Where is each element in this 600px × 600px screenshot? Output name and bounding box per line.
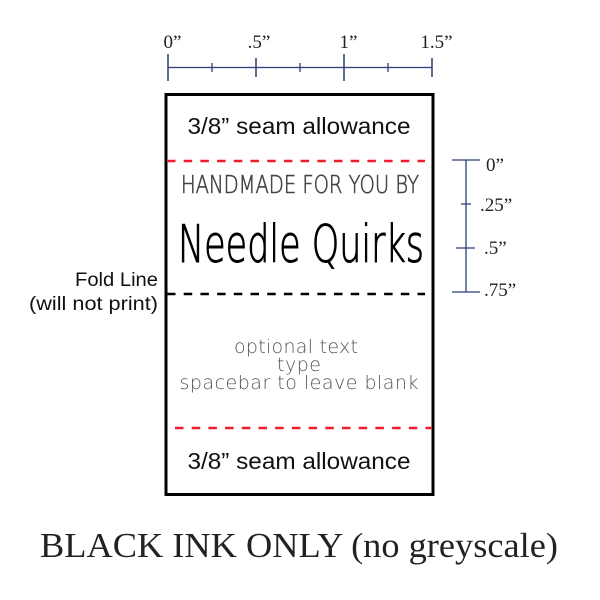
optional text block — [180, 336, 418, 394]
vertical ruler labels — [480, 155, 516, 301]
horizontal ruler labels: 1” — [340, 32, 357, 53]
fold line label: Fold Line — [75, 270, 158, 291]
bottom seam line — [175, 427, 432, 429]
vertical ruler labels: .75” — [484, 280, 516, 301]
optional text block: optional text — [234, 336, 358, 358]
top seam allowance text: 3/8” seam allowance — [188, 113, 410, 139]
horizontal ruler labels: 1.5” — [420, 32, 453, 53]
vertical ruler labels: .5” — [484, 238, 507, 259]
vertical ruler labels: 0” — [486, 155, 504, 176]
horizontal ruler labels — [164, 32, 453, 53]
horizontal ruler labels: .5” — [248, 32, 270, 53]
fold line — [167, 293, 425, 295]
bottom seam allowance text: 3/8” seam allowance — [188, 448, 410, 474]
vertical ruler labels: .25” — [480, 195, 512, 216]
top seam line — [167, 160, 425, 162]
label outline — [166, 94, 433, 494]
fold line label: (will not print) — [29, 294, 158, 315]
fold line label — [29, 270, 158, 315]
horizontal ruler labels: 0” — [164, 32, 181, 53]
optional text block: spacebar to leave blank — [180, 372, 418, 394]
vertical ruler — [452, 160, 480, 292]
horizontal ruler — [168, 54, 432, 81]
optional text block: type — [277, 354, 321, 376]
handmade for you by text: HANDMADE FOR YOU BY — [181, 170, 419, 199]
footer note: BLACK INK ONLY (no greyscale) — [40, 526, 558, 565]
brand name: Needle Quirks — [178, 215, 424, 275]
